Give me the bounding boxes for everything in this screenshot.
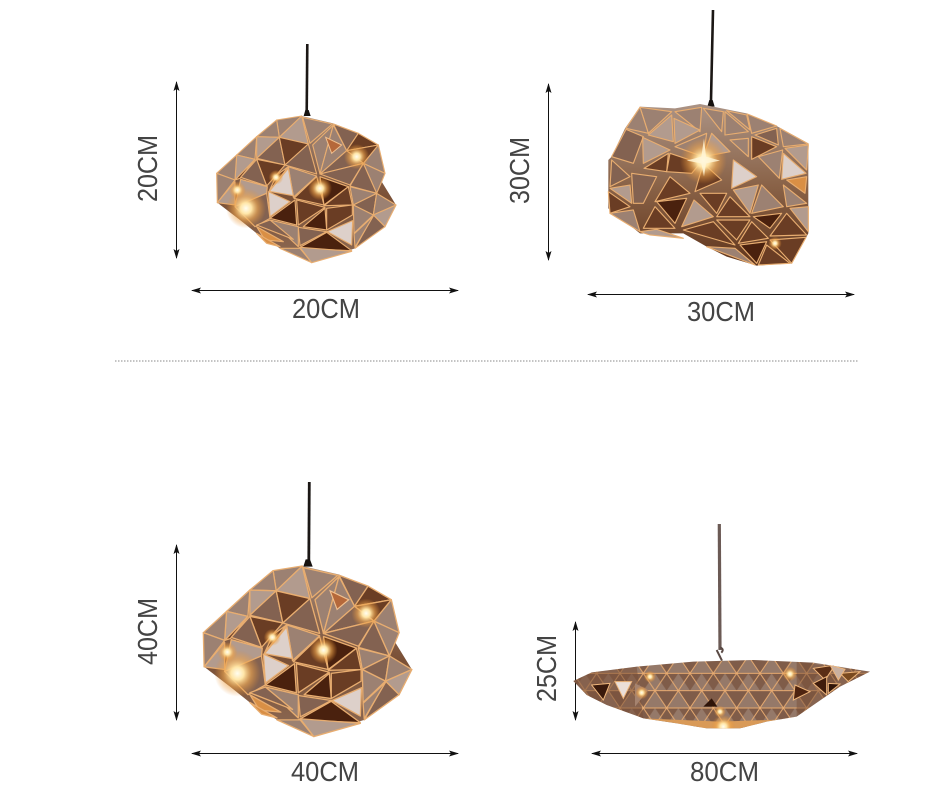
rod: [718, 524, 722, 650]
lamp shade: [574, 646, 870, 728]
lamp shade: [203, 559, 412, 737]
panel: 80CM lamp: [531, 524, 873, 787]
width label: 40CM: [291, 756, 359, 787]
cord: [711, 10, 713, 100]
height label: 20CM: [132, 135, 163, 202]
width arrow 20CM: [192, 290, 458, 292]
width label: 80CM: [690, 756, 759, 787]
height label: 30CM: [504, 137, 535, 204]
divider: [115, 360, 858, 362]
height arrow 20CM: [176, 82, 178, 258]
panel: 30CM lamp: [504, 10, 854, 327]
width label: 30CM: [687, 296, 755, 327]
height label: 40CM: [132, 598, 163, 665]
width arrow 40CM: [192, 752, 458, 754]
width arrow 80CM: [592, 752, 857, 754]
height label: 25CM: [531, 635, 562, 702]
cord: [307, 482, 311, 560]
panel: 20CM lamp: [132, 44, 458, 324]
height arrow 40CM: [176, 545, 178, 720]
lamp shade: [217, 110, 396, 263]
width label: 20CM: [292, 293, 360, 324]
cord: [305, 44, 309, 112]
width arrow 30CM: [588, 294, 854, 296]
height arrow 25CM: [574, 622, 576, 720]
height arrow 30CM: [548, 84, 550, 260]
panel: 40CM lamp: [132, 482, 458, 787]
lamp shade: [608, 100, 808, 266]
